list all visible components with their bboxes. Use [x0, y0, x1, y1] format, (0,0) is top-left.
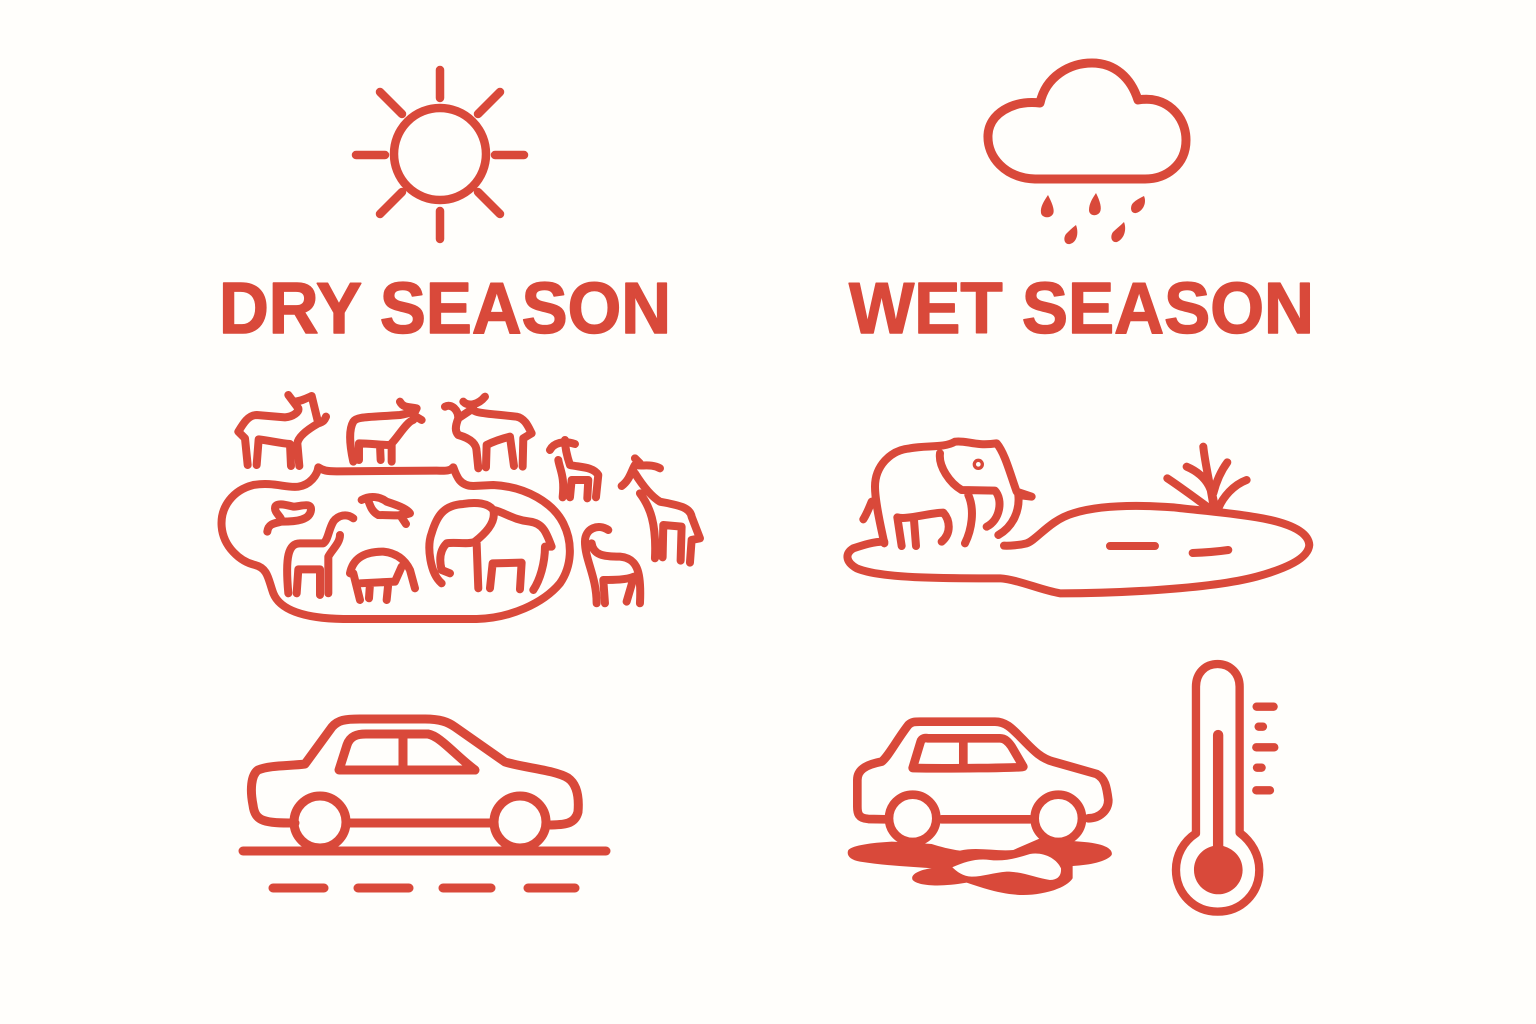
- reeds: [1167, 447, 1247, 510]
- scale marks: [1256, 707, 1274, 790]
- car windows: [913, 738, 1023, 768]
- water ripples: [1110, 546, 1228, 553]
- deer, top left: [238, 395, 326, 466]
- car body: [251, 719, 578, 825]
- pond outline: [847, 506, 1309, 593]
- goat, inside pond: [287, 515, 353, 595]
- heading: dry season: DRY SEASON: [219, 269, 671, 349]
- elephant eye: [977, 463, 980, 466]
- mercury: [1194, 730, 1243, 894]
- road line: [243, 846, 606, 856]
- puddle: [848, 838, 1112, 895]
- giraffe, far right: [622, 458, 700, 563]
- elephant: [863, 441, 1032, 546]
- goat, right: [550, 440, 598, 498]
- waterhole outline: [222, 467, 570, 619]
- small animal, pond top left: [267, 504, 311, 532]
- bird, pond top: [362, 497, 410, 524]
- thermometer outline: [1176, 664, 1259, 912]
- hippo, inside pond: [350, 552, 415, 600]
- buffalo, top right: [445, 397, 532, 468]
- illustration: car on a dry road: [243, 719, 606, 888]
- icon: sun: [356, 70, 524, 239]
- illustration: elephant by a wide waterhole: [847, 441, 1309, 593]
- car body: [857, 722, 1108, 819]
- heading: wet season: WET SEASON: [849, 269, 1314, 349]
- road dashes: [273, 884, 575, 892]
- car wheels: [889, 795, 936, 842]
- icon: thermometer: [1176, 664, 1274, 912]
- car windows: [339, 734, 475, 770]
- antelope, top middle: [350, 402, 422, 462]
- icon: rain cloud: [988, 63, 1186, 244]
- car wheels: [294, 796, 346, 848]
- elephant, inside pond: [429, 503, 552, 590]
- illustration: animals around a crowded waterhole: [222, 395, 700, 619]
- illustration: car in a puddle: [848, 722, 1112, 895]
- antelope, lower right: [585, 527, 640, 603]
